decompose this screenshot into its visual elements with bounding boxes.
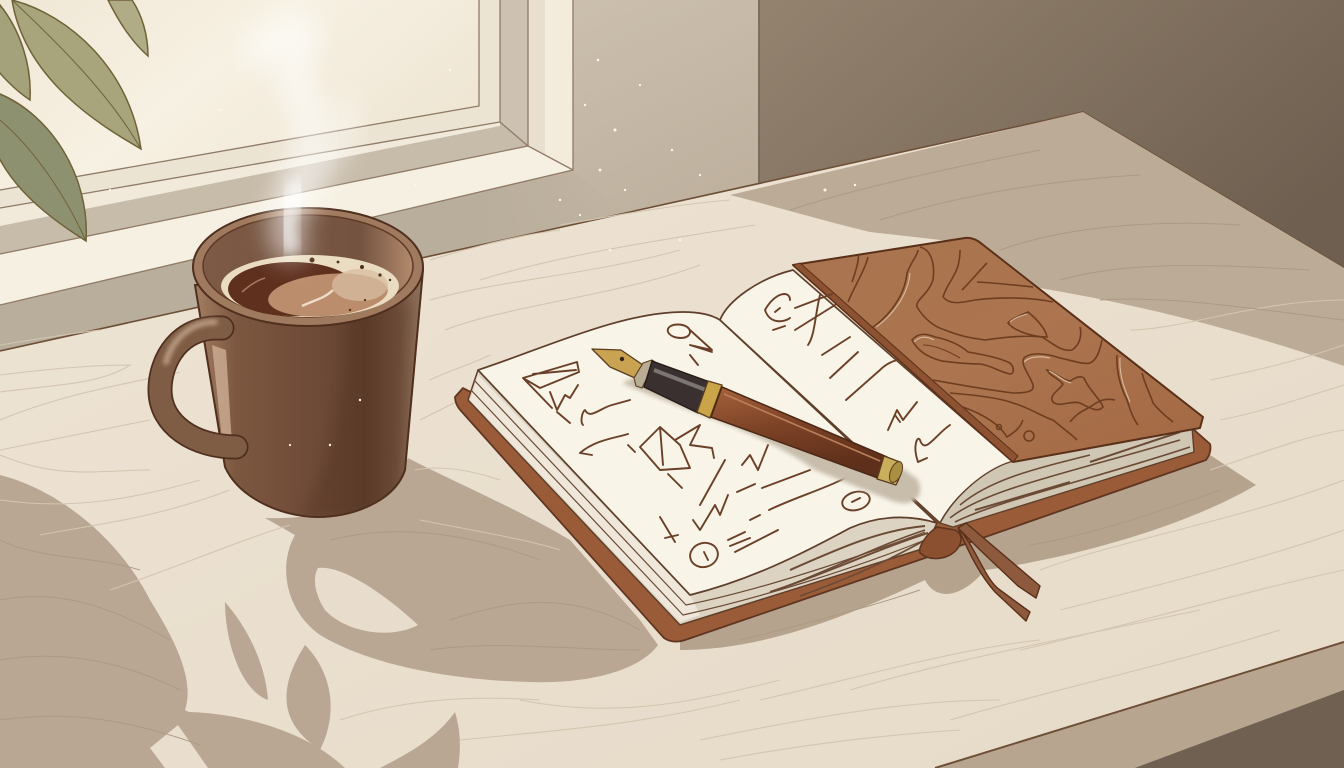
rim [193, 208, 423, 326]
spine bump [920, 527, 961, 559]
gold ring [697, 381, 722, 418]
end cap [877, 456, 901, 485]
dust motes [109, 59, 856, 446]
desk front edge [935, 642, 1344, 768]
window frame and glass [0, 0, 573, 305]
wood grain lines [0, 200, 1344, 760]
leather cover flap with topographic embossing [793, 238, 1203, 462]
steam rising from mug [260, 29, 346, 245]
background: back wall [0, 0, 1344, 360]
desk shadow: upper right [730, 112, 1344, 366]
back cover [455, 388, 1210, 642]
book cast shadow [680, 455, 1256, 650]
left page stack [468, 370, 937, 625]
nib [592, 349, 643, 378]
mug cast shadow [265, 458, 658, 682]
coffee surface [221, 255, 399, 321]
fountain pen [592, 349, 920, 503]
barrel [711, 387, 887, 478]
collar [634, 360, 655, 388]
plant shadow: lower left [0, 475, 460, 768]
ribbon bookmark [958, 523, 1040, 621]
body [195, 270, 423, 517]
pen shadow [622, 375, 920, 503]
grip section [644, 361, 710, 413]
right page [720, 270, 1013, 523]
handle [160, 322, 236, 447]
journal [455, 238, 1210, 642]
left page [478, 312, 937, 595]
coffee mug [160, 208, 423, 517]
page sketches and handwriting [523, 294, 950, 570]
right page stack [940, 427, 1194, 527]
plant leaves [0, 0, 148, 241]
